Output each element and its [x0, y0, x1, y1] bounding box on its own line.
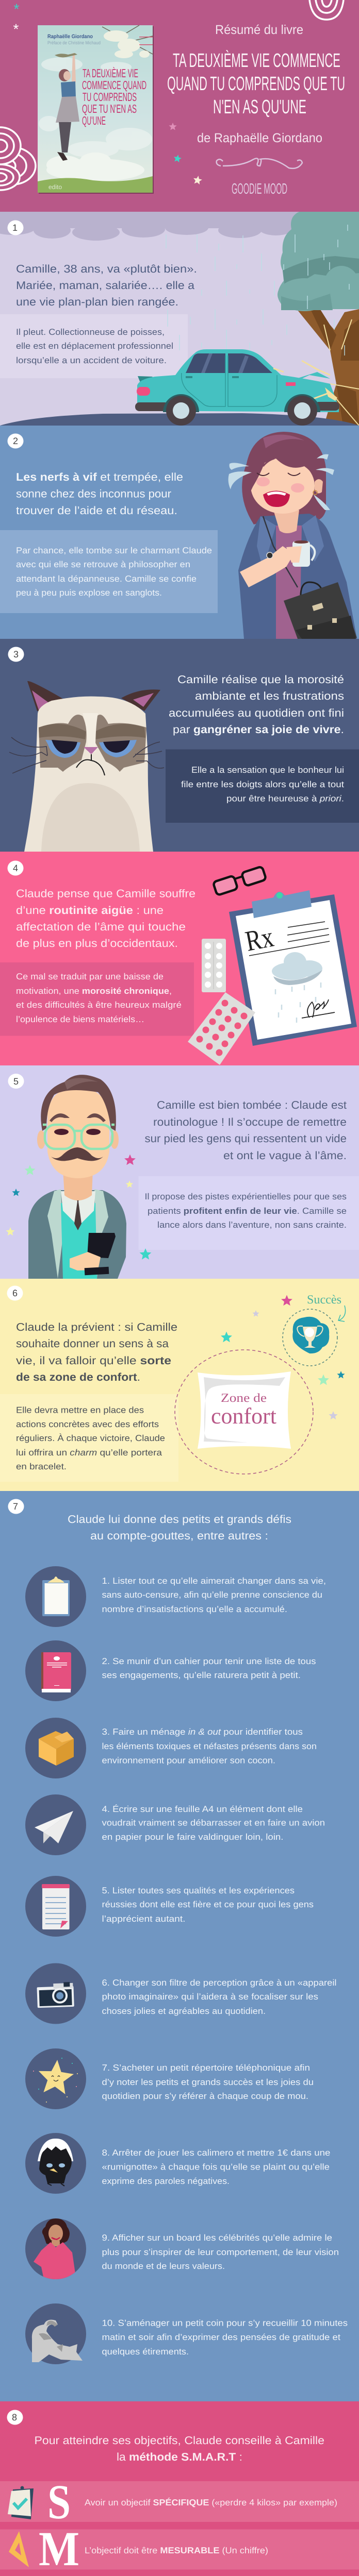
badge 6 [7, 1286, 23, 1300]
challenge 6: choses jolies et agréables au quotidien. [102, 2006, 266, 2016]
grumpy cat [9, 681, 164, 852]
heading text: routinologue ! Il s’occupe de remettre [153, 1116, 347, 1128]
challenge 4 [102, 1804, 325, 1842]
ornament: swash [217, 158, 302, 168]
panel: section 1 [0, 212, 359, 426]
challenge 1: nombre d’insatisfactions qu’elle a accumulé. [102, 1604, 287, 1614]
heading text: de sa zone de confort . [16, 1371, 140, 1383]
prescription clipboard: Rx [243, 921, 276, 958]
challenge 4: voudrait vraiment se débarrasser et en faire un avion [102, 1818, 325, 1828]
challenge 1: sans auto-censure, afin qu’elle prenne conscience du [102, 1590, 322, 1600]
book: author [47, 33, 101, 191]
stars [221, 1295, 345, 1419]
panel: section 4 [0, 852, 359, 1065]
icon: paper plane [35, 1811, 73, 1843]
author: de Raphaëlle Giordano [197, 131, 322, 145]
stripes [0, 2481, 359, 2576]
heading text: la méthode S.M.A.R.T : [117, 2451, 242, 2463]
panel: section 5 [0, 1065, 359, 1279]
badge 3: 3 [13, 649, 19, 659]
badge 6: 6 [12, 1288, 18, 1298]
challenge 10 [102, 2318, 348, 2357]
pillow text: confort [211, 1403, 276, 1429]
challenge 10: 10. S’aménager un petit coin pour s’y recueillir 10 minutes [102, 2318, 348, 2328]
body text: pour être heureuse à priori. [226, 793, 344, 804]
challenge 10: quelques étirements. [102, 2347, 189, 2357]
crying woman illustration [229, 432, 357, 639]
body text: l’opulence de biens matériels… [16, 1014, 144, 1024]
lighter text box [0, 314, 188, 378]
rain [166, 225, 349, 355]
stars [6, 1154, 151, 1260]
challenge 5: 5. Lister toutes ses qualités et les expériences [102, 1886, 295, 1895]
challenge 5: l’apprécient autant. [102, 1914, 186, 1924]
heading text [68, 1513, 291, 1542]
arm and hand [240, 546, 294, 587]
badge 3 [8, 647, 24, 662]
challenge 7: d’y noter les petits et grands succès et les joies du [102, 2077, 314, 2087]
book: author: Raphaëlle Giordano [47, 33, 93, 40]
heading text: une vie plan-plan bien rangée. [16, 296, 178, 308]
moustache [51, 1147, 103, 1161]
text box [0, 1394, 178, 1482]
heading text: au compte-gouttes, entre autres : [90, 1530, 268, 1542]
body text: motivation, une morosité chronique , [16, 986, 172, 996]
decoration: left rosettes [0, 127, 36, 190]
heading text: ambiante et les frustrations [195, 690, 344, 702]
subtitle: Résumé du livre [215, 23, 303, 37]
badge 1 [7, 221, 24, 235]
heading text: d’une routinite aigüe : une [16, 904, 164, 917]
challenge 10: matin et soir afin d’exprimer des pensées de gratitude et [102, 2332, 340, 2342]
book cover [38, 25, 154, 194]
glasses [43, 1125, 115, 1149]
book: title: COMMENCE QUAND [82, 78, 146, 92]
text box [138, 1176, 359, 1250]
dashed circle: comfort zone [175, 1350, 313, 1474]
explanations: L’objectif doit être MESURABLE (Un chiffre) [85, 2546, 268, 2555]
body text [181, 765, 344, 804]
pillow text [211, 1392, 276, 1429]
icon: notebook [41, 1652, 71, 1692]
body text: actions concrètes avec des efforts [16, 1419, 159, 1429]
heading text: et ont le vague à l’âme. [223, 1149, 347, 1162]
heading text [34, 2434, 324, 2463]
challenge 8: «rumignotte» à chaque fois qu’elle se plaint ou qu’elle [102, 2162, 330, 2172]
signature [302, 999, 335, 1018]
challenge 8: 8. Arrêter de jouer les calimero et mettre 1€ dans une [102, 2148, 330, 2158]
face mask [39, 715, 146, 772]
tree [278, 212, 359, 426]
heading text [144, 1099, 347, 1162]
challenge 8 [102, 2148, 330, 2186]
badge 1: 1 [12, 223, 18, 233]
decoration: asterisks and stars: * [14, 1, 20, 17]
heading text: Claude la prévient : si Camille [16, 1321, 177, 1333]
icon: clipboard [42, 1577, 70, 1616]
book: title: TU COMPRENDS [83, 90, 137, 104]
body text: Elle a la sensation que le bonheur lui [191, 765, 344, 775]
heading text [16, 887, 195, 950]
challenge 9 [102, 2233, 339, 2271]
body text: Elle devra mettre en place des [16, 1405, 144, 1415]
panel: section 8 SMART [0, 2401, 359, 2576]
icon: celebrity woman [34, 2218, 76, 2279]
title [167, 50, 345, 118]
cloud on prescription [272, 952, 322, 980]
prescription clipboard [229, 890, 357, 1046]
book: title [82, 66, 146, 127]
heading text: Camille, 38 ans, va «plutôt bien». [16, 263, 197, 275]
heading text: souhaite donner un sens à sa [16, 1337, 169, 1350]
challenge 8: exprime des paroles négatives. [102, 2176, 230, 2186]
icon: smiling star [33, 2058, 78, 2103]
body text: Ce mal se traduit par une baisse de [16, 972, 164, 981]
book: bottom cloud [46, 152, 144, 181]
heading text: de plus en plus d’occidentaux. [16, 937, 178, 950]
book: woman reaching [55, 53, 79, 161]
label: Goodie Mood: GOODIE MOOD [232, 181, 287, 197]
challenge 2: ses engagements, qu’elle raturera petit à petit. [102, 1670, 301, 1680]
challenge 6: 6. Changer son filtre de perception grâce à un «appareil [102, 1978, 336, 1988]
body text: Il propose des pistes expérientielles pour que ses [144, 1192, 347, 1201]
label: succès: Succès [307, 1293, 341, 1307]
book: grass [38, 176, 153, 193]
book: author: edito [48, 183, 62, 191]
body text: Il pleut. Collectionneuse de poisses, [16, 327, 165, 337]
challenge 9: 9. Afficher sur un board les célébrités qu’elle admire le [102, 2233, 332, 2243]
explanations [85, 2497, 341, 2576]
tears [229, 454, 334, 510]
book: blossom branch [102, 25, 153, 58]
panel: section 7 [0, 1491, 359, 2401]
body text: lance alors dans l’aventure, non sans crainte. [157, 1220, 347, 1230]
challenge 7: 7. S’acheter un petit répertoire téléphonique afin [102, 2063, 310, 2073]
panel: section 3 [0, 639, 359, 852]
challenge 1: 1. Lister tout ce qu’elle aimerait changer dans sa vie, [102, 1576, 326, 1586]
badge 4: 4 [13, 863, 18, 873]
text box [0, 530, 218, 613]
text box [0, 962, 194, 1036]
challenge 7: quotidien pour s’y référer à chaque coup de mou. [102, 2091, 308, 2101]
eyes [45, 740, 137, 758]
challenge 5 [102, 1886, 314, 1924]
badge 8 [7, 2410, 23, 2425]
badge 7 [8, 1499, 24, 1514]
body text [16, 327, 173, 365]
icon circles [25, 1566, 86, 2364]
challenge 6 [102, 1978, 336, 2016]
body text: avec qui elle se retrouve à philosopher en [16, 560, 190, 569]
challenge 3: environnement pour améliorer son cocon. [102, 1756, 275, 1765]
heading text: sonne chez des inconnus pour [16, 487, 171, 500]
icon: cardboard box [39, 1731, 74, 1766]
heading text: Pour atteindre ses objectifs, Claude conseille à Camille [34, 2434, 324, 2447]
body text: lorsqu’elle a un accident de voiture. [16, 355, 167, 365]
challenge 9: du monde et de leurs valeurs. [102, 2261, 225, 2271]
bag [284, 582, 357, 639]
body text: file entre les doigts alors qu’elle a tout [181, 779, 344, 789]
letters: M [39, 2521, 79, 2576]
challenge 2: 2. Se munir d’un cahier pour tenir une liste de tous [102, 1656, 316, 1666]
body text [144, 1192, 347, 1230]
challenge 4: 4. Écrire sur une feuille A4 un élément dont elle [102, 1804, 303, 1814]
book: title: TA DEUXIÈME VIE [83, 66, 138, 80]
car [135, 349, 339, 426]
badge 4 [7, 860, 24, 876]
nose and mouth [84, 747, 98, 754]
icon: camera [37, 1982, 74, 2008]
body text: attendant la dépanneuse. Camille se confie [16, 574, 197, 584]
heading text [169, 673, 344, 736]
heading text: Claude lui donne des petits et grands défis [68, 1513, 291, 1526]
heading text: Camille réalise que la morosité [177, 673, 344, 686]
heading text [16, 471, 183, 517]
pill pack white [202, 939, 226, 992]
coffee cup [286, 540, 315, 567]
badge 8: 8 [12, 2412, 17, 2422]
challenge 9: plus pour s’inspirer de leur comportement, de leur vision [102, 2247, 339, 2257]
heading text [16, 263, 197, 308]
heading text: Claude pense que Camille souffre [16, 887, 195, 900]
explanations: Avoir un objectif SPÉCIFIQUE («perdre 4 kilos» par exemple) [85, 2497, 337, 2507]
decoration: asterisks and stars: * [13, 21, 19, 37]
icon: set square [9, 2531, 29, 2567]
body text: et des difficultés à être heureux malgré [16, 1000, 182, 1010]
challenge 1 [102, 1576, 326, 1614]
challenge 3 [102, 1727, 317, 1765]
letters [39, 2475, 79, 2576]
heading text: Camille est bien tombée : Claude est [157, 1099, 347, 1111]
whiskers [9, 737, 164, 773]
badge 2 [7, 434, 24, 448]
letters: S [47, 2475, 71, 2529]
body text: lui offrira un charm qu’elle portera [16, 1448, 162, 1458]
name badge and folder [87, 1233, 116, 1258]
icon: checklist [8, 2486, 34, 2519]
trophy [292, 1317, 329, 1353]
book: author: Préface de Christine Michaud [47, 40, 101, 45]
watch [267, 552, 273, 558]
challenge 5: réussies dont elle est fière et ce pour quoi les gens [102, 1900, 314, 1909]
pill pack pink [188, 992, 255, 1065]
challenge 7 [102, 2063, 314, 2101]
pillow text: Zone de [221, 1392, 267, 1405]
badge 7: 7 [13, 1501, 18, 1512]
strap [263, 516, 298, 587]
heading text: trouver de l’aide et du réseau. [16, 504, 177, 517]
challenge 6: photo imaginaire» qui l’aidera à se focaliser sur les [102, 1992, 318, 2002]
arrow [338, 1306, 346, 1321]
body text: peu à peu puis explose en sanglots. [16, 588, 162, 598]
pillow [198, 1371, 291, 1449]
body text: en bracelet. [16, 1462, 67, 1471]
dashed circle: success [283, 1309, 337, 1366]
heading text: Les nerfs à vif et trempée, elle [16, 471, 183, 483]
icon: notepad [42, 1884, 70, 1929]
body text [16, 972, 182, 1024]
decoration: top right rosette [309, 0, 344, 20]
glasses [213, 866, 266, 895]
badge 2: 2 [13, 436, 18, 446]
panel: section 6 [0, 1279, 359, 1491]
body text: réguliers. À chaque victoire, Claude [16, 1433, 165, 1443]
heading text [16, 1321, 177, 1383]
icon: Calimero chick [38, 2139, 73, 2186]
badge 5 [8, 1074, 24, 1089]
list: challenges [102, 1576, 348, 2357]
body text [16, 546, 212, 598]
heading text: sur pied les gens qui ressentent un vide [144, 1132, 347, 1145]
panel: header [0, 0, 359, 212]
decoration: asterisks and stars [13, 1, 203, 185]
heading text: accumulées au quotidien ont fini [169, 707, 344, 719]
book: title: QUE TU N'EN AS [82, 102, 137, 115]
body text: patients profitent enfin de leur vie . Camille se [148, 1206, 347, 1216]
challenge 3: les éléments toxiques et néfastes présents dans son [102, 1741, 317, 1751]
storm cloud band [0, 212, 359, 241]
text box [166, 749, 359, 823]
Claude illustration [28, 1075, 126, 1279]
heading text: affectation de l’âme qui touche [16, 921, 186, 933]
heading text: vie, il va falloir qu’elle sorte [16, 1354, 171, 1367]
body text: elle est en déplacement professionnel [16, 341, 173, 351]
panel: section 2 [0, 426, 359, 639]
heading text: par gangréner sa joie de vivre . [173, 723, 344, 736]
icon: stretching cat [32, 2320, 83, 2362]
body text: Par chance, elle tombe sur le charmant Claude [16, 546, 212, 555]
body text [16, 1405, 165, 1471]
challenge 2 [102, 1656, 316, 1680]
road [0, 413, 359, 426]
challenge 4: en papier pour le faire valdinguer loin, loin. [102, 1832, 284, 1842]
challenge 3: 3. Faire un ménage in & out pour identifier tous [102, 1727, 303, 1737]
book: title: QU'UNE [82, 114, 106, 127]
badge 5: 5 [13, 1076, 19, 1087]
heading text: Mariée, maman, salariée…. elle a [16, 279, 194, 292]
